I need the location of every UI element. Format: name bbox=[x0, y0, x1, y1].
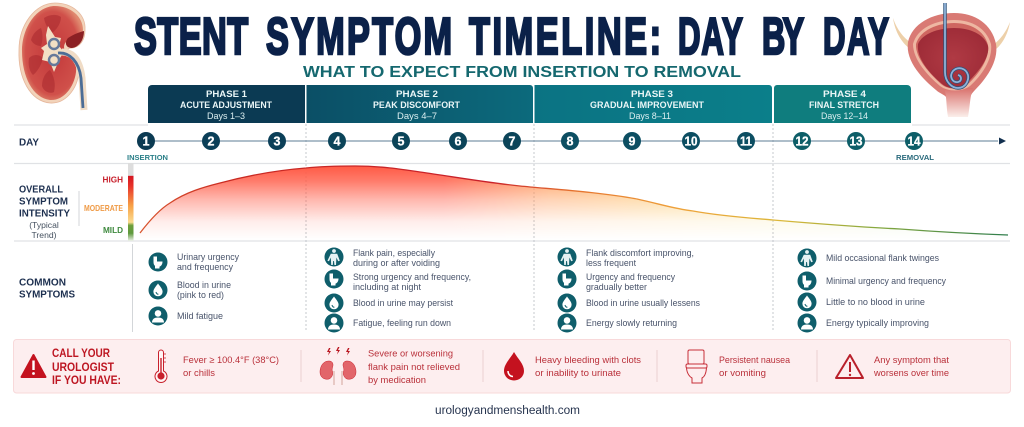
icon: thermometer bbox=[155, 350, 167, 382]
alert item: nausea bbox=[719, 355, 791, 378]
day timeline: 4 bbox=[334, 134, 341, 148]
phase 1 symptoms bbox=[148, 252, 239, 326]
alert item: flank pain bbox=[368, 348, 460, 385]
phase 3 symptoms: Blood in urine usually lessens bbox=[586, 298, 700, 308]
phase 1 header: Days 1–3 bbox=[207, 110, 245, 121]
alert item: fever: Fever ≥ 100.4°F (38°C) bbox=[183, 355, 279, 365]
title: BY bbox=[762, 8, 804, 66]
intensity scale: HIGH bbox=[103, 176, 123, 184]
phase 2 header bbox=[306, 85, 533, 123]
day timeline: 14 bbox=[908, 134, 921, 148]
row label: day: DAY bbox=[19, 138, 39, 148]
phase 4 symptoms bbox=[798, 248, 946, 332]
phase 4 header: FINAL STRETCH bbox=[809, 100, 879, 111]
title: SYMPTOM bbox=[266, 8, 452, 66]
alert heading bbox=[52, 346, 121, 387]
alert heading: IF YOU HAVE: bbox=[52, 373, 121, 387]
illustration: bladder with stent bbox=[893, 3, 1010, 117]
illustration: kidney with stent bbox=[19, 3, 85, 110]
phase 1 symptoms: Mild fatigue bbox=[177, 311, 223, 321]
phase 3 symptoms: less frequent bbox=[586, 258, 636, 268]
alert item: fever: or chills bbox=[183, 368, 215, 378]
row label: overall symptom intensity bbox=[19, 184, 70, 240]
icon: alert triangle bbox=[22, 355, 46, 377]
day timeline: 8 bbox=[567, 134, 574, 148]
phase 4 symptoms: Energy typically improving bbox=[826, 318, 929, 328]
phase 2 symptoms: Fatigue, feeling run down bbox=[353, 318, 451, 328]
phase 1 symptoms: (pink to red) bbox=[177, 290, 224, 300]
day timeline: 3 bbox=[274, 134, 281, 148]
phase 4 header: PHASE 4 bbox=[823, 89, 867, 100]
alert heading: CALL YOUR bbox=[52, 346, 110, 360]
title: TIMELINE: bbox=[469, 8, 661, 66]
phase 3 header: Days 8–11 bbox=[629, 110, 671, 121]
phase 4 symptoms: Mild occasional flank twinges bbox=[826, 253, 939, 263]
intensity scale: MODERATE bbox=[84, 203, 123, 213]
panel: call your urologist alert bbox=[14, 340, 1010, 393]
row label: overall symptom intensity: INTENSITY bbox=[19, 208, 70, 220]
phase 3 symptoms: gradually better bbox=[586, 282, 647, 292]
phase 4 symptoms: Little to no blood in urine bbox=[826, 297, 925, 307]
phase 3 header bbox=[534, 85, 772, 123]
phase 2 symptoms: Strong urgency and frequency, bbox=[353, 272, 471, 282]
phase 4 header: Days 12–14 bbox=[821, 110, 868, 121]
title bbox=[134, 8, 889, 66]
phase 4 symptoms: Minimal urgency and frequency bbox=[826, 276, 946, 286]
subtitle: WHAT TO EXPECT FROM INSERTION TO REMOVAL bbox=[303, 64, 741, 81]
alert item: fever bbox=[183, 355, 279, 378]
day timeline: 2 bbox=[208, 134, 215, 148]
phase 3 header: GRADUAL IMPROVEMENT bbox=[590, 100, 704, 111]
row label: overall symptom intensity: (Typical bbox=[29, 220, 59, 230]
title: DAY bbox=[678, 8, 743, 66]
alert item: any symptom: worsens over time bbox=[873, 368, 949, 378]
chart: symptom intensity curve bbox=[140, 166, 1008, 240]
title: DAY bbox=[823, 8, 889, 66]
alert item: flank pain: Severe or worsening bbox=[368, 348, 453, 358]
phase 1 header: PHASE 1 bbox=[206, 89, 248, 100]
phase 2 symptoms: during or after voiding bbox=[353, 258, 440, 268]
alert item: flank pain: flank pain not relieved bbox=[368, 362, 460, 372]
icon: blood drop bbox=[504, 352, 524, 380]
phase 1 symptoms: and frequency bbox=[177, 262, 233, 272]
intensity scale: MILD bbox=[103, 226, 123, 235]
icon: toilet bbox=[686, 350, 707, 383]
alert item: heavy bleeding bbox=[535, 355, 641, 378]
alert item: heavy bleeding: Heavy bleeding with clots bbox=[535, 355, 641, 365]
alert item: heavy bleeding: or inability to urinate bbox=[535, 368, 621, 378]
day timeline: 5 bbox=[398, 134, 405, 148]
phase 2 header: PEAK DISCOMFORT bbox=[373, 100, 460, 111]
day timeline: 1 bbox=[143, 134, 150, 148]
phase 1 symptoms: Blood in urine bbox=[177, 280, 231, 290]
row label: common symptoms bbox=[19, 278, 75, 300]
phase 3 symptoms bbox=[558, 248, 700, 332]
phase 1 header bbox=[148, 85, 305, 123]
icon: kidneys with pain bolts bbox=[320, 347, 356, 385]
phase 1 header: ACUTE ADJUSTMENT bbox=[180, 100, 272, 111]
alert item: nausea: Persistent nausea bbox=[719, 355, 791, 365]
alert heading: UROLOGIST bbox=[52, 360, 115, 374]
label: removal: REMOVAL bbox=[896, 153, 935, 162]
title: STENT bbox=[134, 8, 248, 66]
row label: common symptoms: SYMPTOMS bbox=[19, 290, 75, 300]
phase 2 symptoms bbox=[324, 248, 471, 332]
day timeline: 9 bbox=[629, 134, 636, 148]
day timeline: 12 bbox=[796, 134, 809, 148]
alert item: any symptom bbox=[873, 355, 949, 378]
icon: warning triangle outline bbox=[836, 355, 863, 378]
phase 2 header: PHASE 2 bbox=[396, 89, 438, 100]
footer website: urologyandmenshealth.com bbox=[435, 405, 580, 417]
row label: overall symptom intensity: Trend) bbox=[32, 230, 57, 240]
phase 3 header: PHASE 3 bbox=[631, 89, 673, 100]
alert item: flank pain: by medication bbox=[368, 375, 426, 385]
phase 2 symptoms: including at night bbox=[353, 282, 421, 292]
phase 3 symptoms: Flank discomfort improving, bbox=[586, 248, 694, 258]
day timeline: 6 bbox=[455, 134, 462, 148]
alert item: any symptom: Any symptom that bbox=[874, 355, 949, 365]
phase 2 symptoms: Flank pain, especially bbox=[353, 248, 435, 258]
day timeline: 7 bbox=[509, 134, 516, 148]
row label: overall symptom intensity: OVERALL bbox=[19, 184, 63, 196]
phase 3 symptoms: Urgency and frequency bbox=[586, 272, 675, 282]
day timeline: 13 bbox=[850, 134, 863, 148]
phase 3 symptoms: Energy slowly returning bbox=[586, 318, 677, 328]
alert item: nausea: or vomiting bbox=[719, 368, 766, 378]
phase 4 header bbox=[774, 85, 911, 123]
day timeline: 10 bbox=[684, 134, 698, 148]
day timeline: 11 bbox=[740, 134, 752, 148]
phase 1 symptoms: Urinary urgency bbox=[177, 252, 239, 262]
day timeline bbox=[137, 132, 1006, 150]
phase 2 symptoms: Blood in urine may persist bbox=[353, 298, 453, 308]
label: insertion: INSERTION bbox=[127, 153, 168, 162]
phase 2 header: Days 4–7 bbox=[397, 110, 437, 121]
intensity scale bbox=[84, 163, 134, 241]
row label: overall symptom intensity: SYMPTOM bbox=[19, 196, 68, 208]
row label: common symptoms: COMMON bbox=[19, 278, 66, 288]
